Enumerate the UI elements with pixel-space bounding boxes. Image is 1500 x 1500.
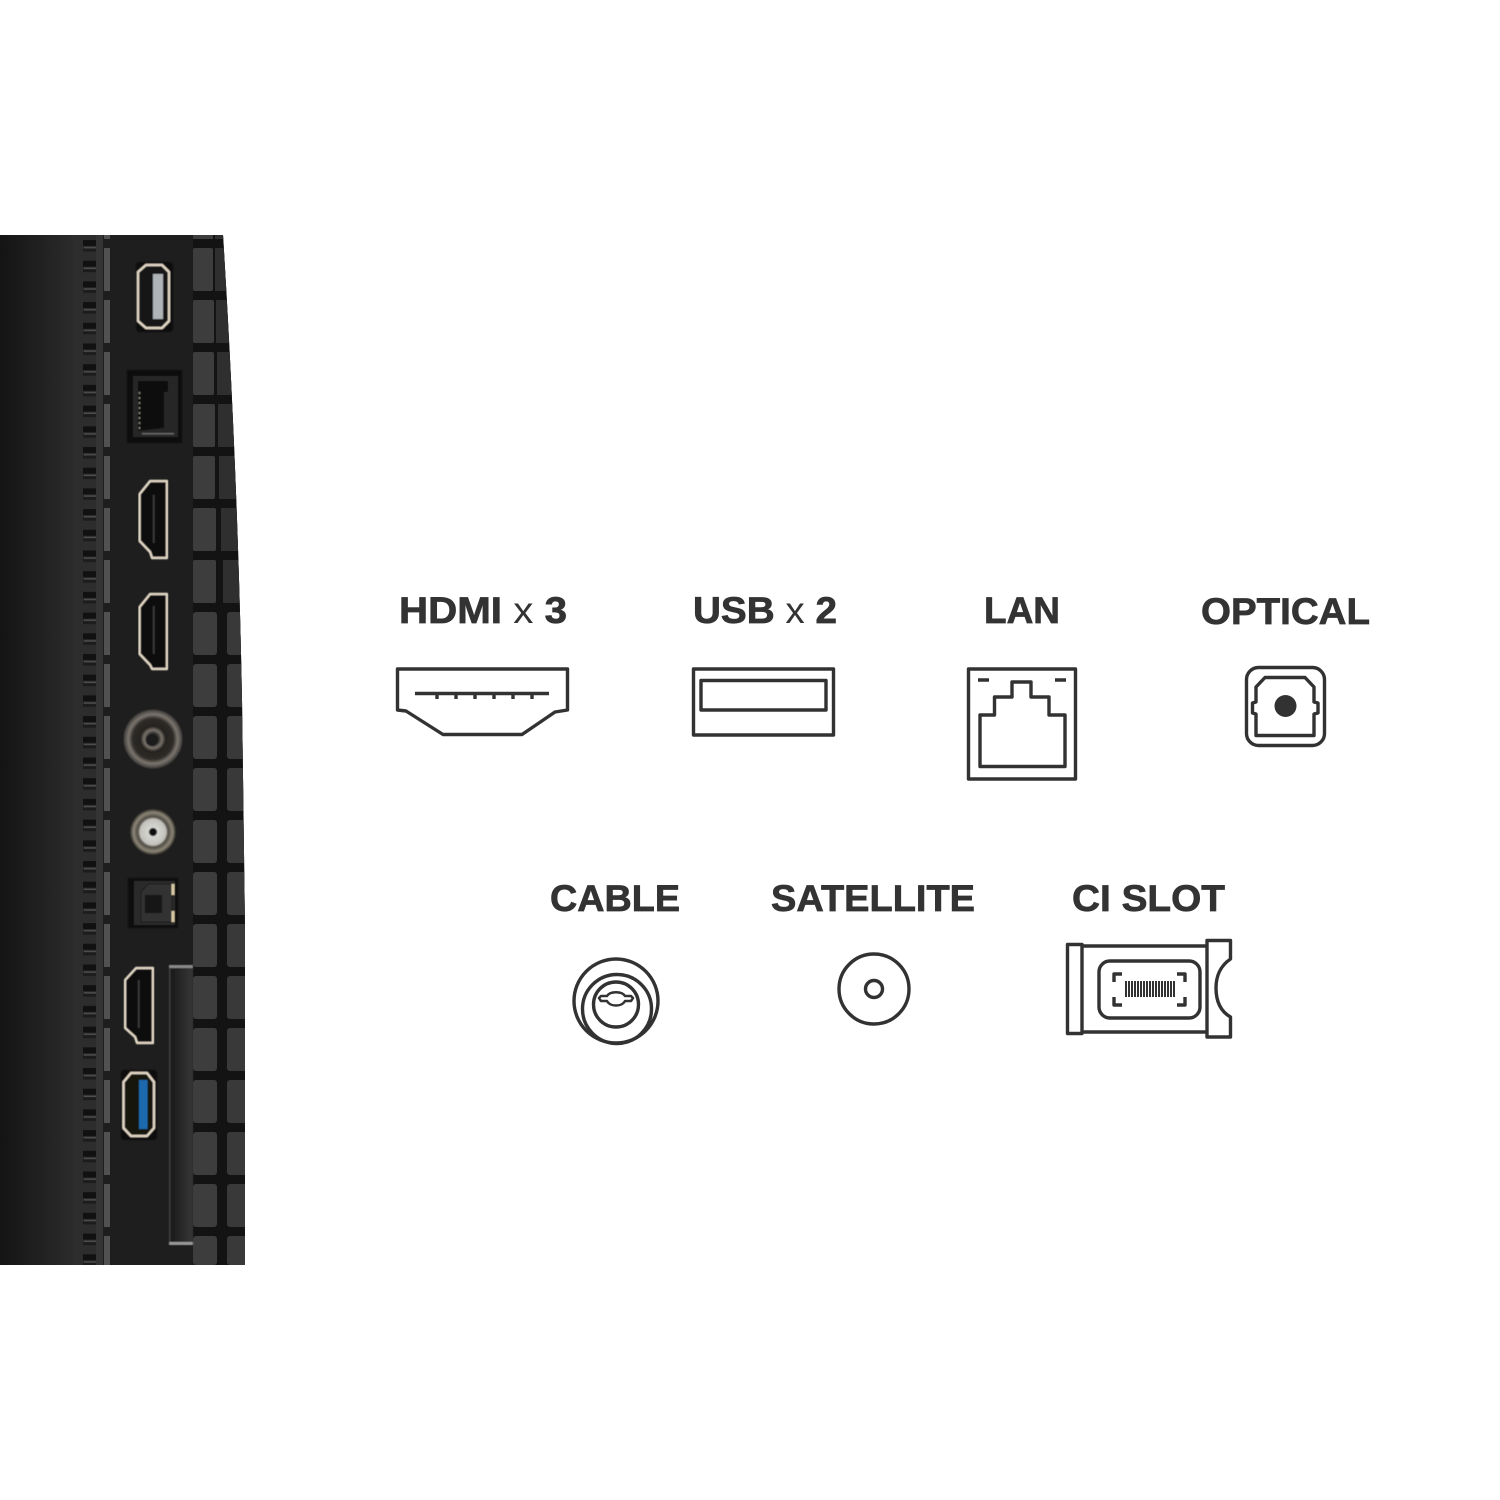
port: HDMI 3 — [125, 968, 153, 1043]
label: CABLE: CABLE — [550, 878, 680, 919]
port: USB blue — [121, 1070, 157, 1140]
port: satellite — [130, 809, 176, 855]
label: HDMI x 3: HDMI x 3 — [399, 590, 567, 631]
port: USB top — [136, 262, 173, 332]
icon: USB — [694, 669, 834, 735]
label: SATELLITE: SATELLITE — [771, 878, 975, 919]
port: HDMI 1 — [140, 481, 167, 558]
vent grille columns — [104, 235, 247, 1265]
label: OPTICAL: OPTICAL — [1201, 591, 1370, 632]
icon: CI slot — [1068, 940, 1230, 1037]
icon: optical — [1246, 668, 1324, 746]
port: cable antenna — [123, 709, 183, 769]
port: LAN — [127, 370, 182, 443]
icon: HDMI — [398, 669, 568, 734]
icon: LAN — [968, 669, 1076, 779]
label: USB x 2: USB x 2 — [693, 590, 837, 631]
label: CI SLOT: CI SLOT — [1072, 878, 1225, 919]
port: CI slot — [169, 965, 193, 1245]
port: optical — [128, 878, 178, 928]
label: LAN: LAN — [984, 590, 1060, 631]
port: HDMI 2 — [140, 594, 167, 669]
icon: satellite — [839, 954, 909, 1024]
icon: cable — [574, 959, 658, 1044]
panel: TV rear side with ports — [0, 235, 250, 1265]
